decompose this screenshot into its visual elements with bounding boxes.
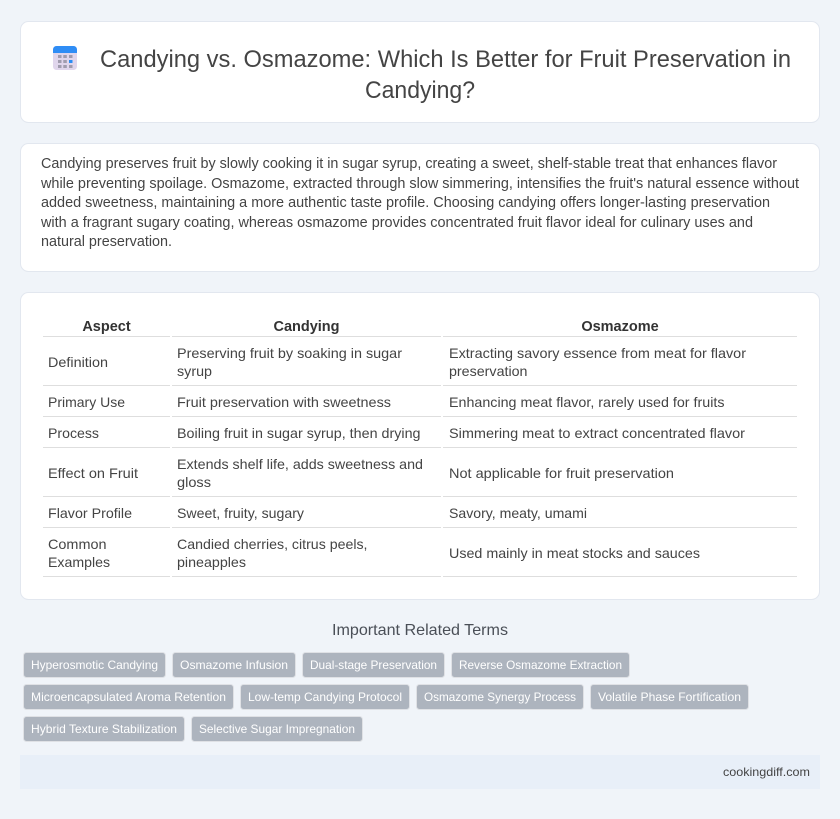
related term tags: Hyperosmotic Candying — [31, 658, 158, 672]
panel: introduction text: Candying preserves fruit by slowly cooking it in sugar syrup, creating a sweet, shelf-stable treat that enhances flavor — [41, 156, 777, 172]
related term tags: Dual-stage Preservation — [310, 658, 437, 672]
footer: cookingdiff.com — [723, 765, 810, 779]
panel: introduction text: added sweetness, maintaining a more authentic taste profile. Choosing candying offers longer-lasting preservation — [41, 195, 770, 211]
row: common examples: Used mainly in meat stocks and sauces — [449, 545, 700, 561]
row: common examples — [48, 536, 700, 570]
row: effect on fruit: Extends shelf life, adds sweetness and — [177, 456, 423, 472]
table header row: Aspect — [82, 319, 131, 335]
related term tags: Hybrid Texture Stabilization — [31, 722, 177, 736]
panel: comparison table — [20, 292, 820, 600]
panel: introduction text — [20, 144, 820, 272]
row: primary use — [48, 394, 724, 410]
row: common examples: Examples — [48, 554, 110, 570]
row: effect on fruit: Not applicable for fruit preservation — [449, 465, 674, 481]
row: flavor profile: Flavor Profile — [48, 505, 132, 521]
panel: title header — [20, 22, 820, 122]
row: definition: Extracting savory essence from meat for flavor — [449, 345, 746, 361]
footer — [20, 755, 820, 789]
related term tags: Selective Sugar Impregnation — [199, 722, 355, 736]
row: definition: Preserving fruit by soaking in sugar — [177, 345, 402, 361]
related term tags: Osmazome Synergy Process — [424, 690, 576, 704]
row: primary use: Primary Use — [48, 394, 125, 410]
row: process — [48, 425, 745, 441]
row: definition — [48, 345, 746, 379]
row: common examples: pineapples — [177, 554, 246, 570]
row: primary use: Enhancing meat flavor, rarely used for fruits — [449, 394, 724, 410]
row: common examples: Common — [48, 536, 106, 552]
related term tags: Volatile Phase Fortification — [598, 690, 741, 704]
title: Candying? — [365, 77, 475, 104]
row: primary use: Fruit preservation with sweetness — [177, 394, 391, 410]
related term tags — [24, 652, 748, 742]
heading: important related terms: Important Related Terms — [332, 622, 508, 639]
table header row: Osmazome — [581, 319, 659, 335]
row: effect on fruit: gloss — [177, 474, 211, 490]
title: Candying vs. Osmazome: Which Is Better for Fruit Preservation in — [100, 46, 791, 73]
row: effect on fruit: Effect on Fruit — [48, 465, 138, 481]
related term tags: Osmazome Infusion — [180, 658, 288, 672]
panel: introduction text: while preventing spoilage. Osmazome, extracted through slow simmering, intensifies the fruit's natural essence without — [40, 176, 799, 192]
related term tags: Microencapsulated Aroma Retention — [31, 690, 226, 704]
title — [100, 46, 791, 104]
related term tags: Low-temp Candying Protocol — [248, 690, 402, 704]
row: definition: syrup — [177, 363, 212, 379]
table header row — [82, 319, 659, 335]
related term tags: Reverse Osmazome Extraction — [459, 658, 622, 672]
row: definition: Definition — [48, 354, 108, 370]
row: flavor profile: Savory, meaty, umami — [449, 505, 587, 521]
row: process: Simmering meat to extract concentrated flavor — [449, 425, 745, 441]
row: flavor profile: Sweet, fruity, sugary — [177, 505, 304, 521]
row: definition: preservation — [449, 363, 528, 379]
icon: calendar — [53, 46, 77, 70]
row: process: Boiling fruit in sugar syrup, then drying — [177, 425, 420, 441]
row: process: Process — [48, 425, 99, 441]
row: flavor profile — [48, 505, 587, 521]
panel: introduction text: natural preservation. — [41, 234, 172, 250]
row: common examples: Candied cherries, citrus peels, — [177, 536, 368, 552]
row: effect on fruit — [48, 456, 674, 490]
table header row: Candying — [273, 319, 340, 335]
panel: introduction text: with a fragrant sugary coating, whereas osmazome provides concentrated fruit flavor ideal for culinary uses and — [40, 215, 753, 231]
